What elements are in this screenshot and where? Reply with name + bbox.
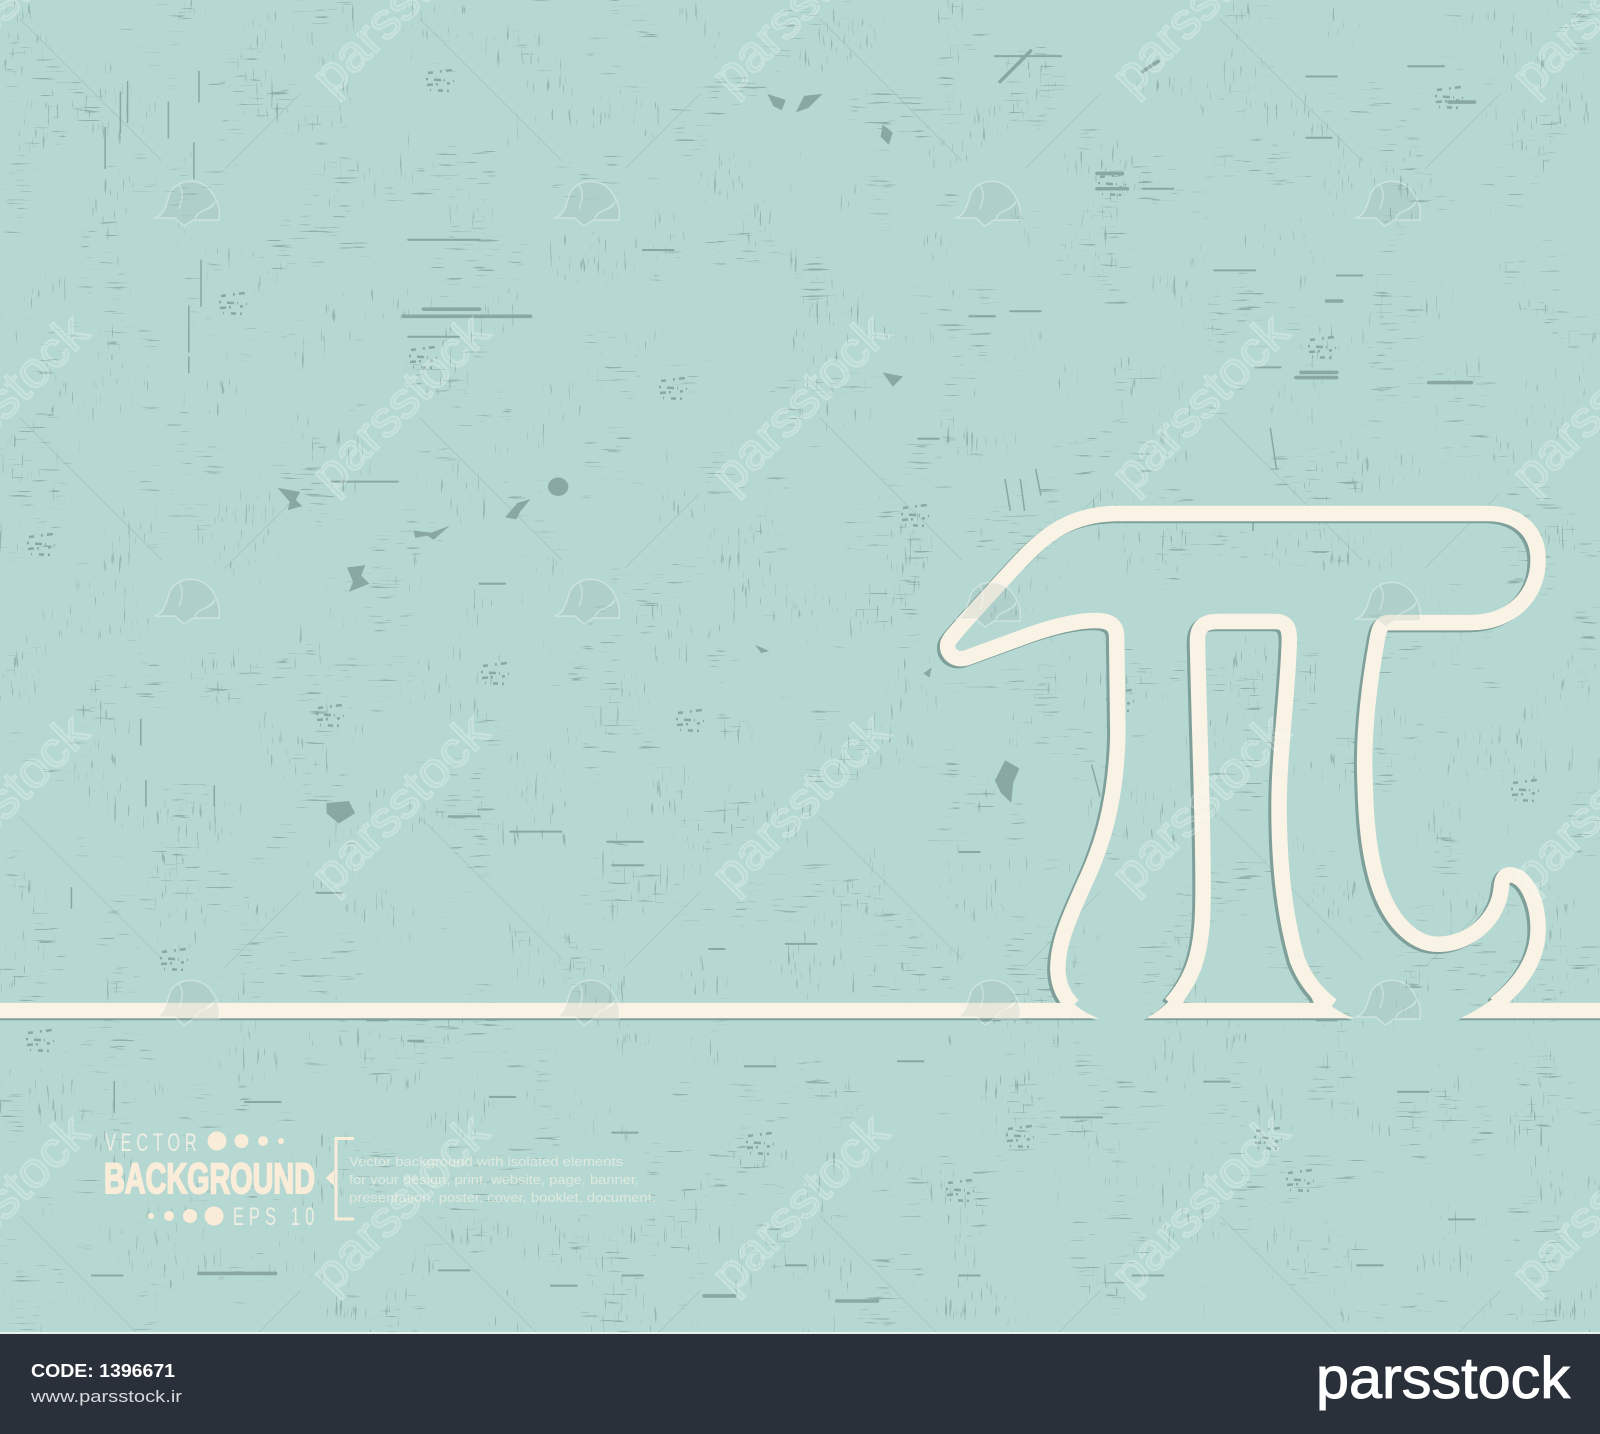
footer bar bbox=[0, 1332, 1600, 1434]
pi middle stem outline bbox=[1171, 622, 1332, 1006]
pi outer outline bbox=[948, 514, 1538, 1006]
description text bbox=[349, 1154, 656, 1205]
watermark: repeated parsstock text: parsstock bbox=[700, 703, 900, 903]
top dots bbox=[208, 1132, 284, 1150]
website: www.parsstock.ir bbox=[30, 1387, 182, 1406]
logo wordmark: parsstock bbox=[1316, 1346, 1571, 1411]
description text: Vector background with isolated elements bbox=[349, 1154, 624, 1169]
watermark: repeated parsstock text: parsstock bbox=[300, 1103, 500, 1303]
watermark: repeated parsstock text: parsstock bbox=[1100, 1103, 1300, 1303]
heading: VECTOR: VECTOR bbox=[105, 1130, 197, 1157]
middle foot base bbox=[1146, 964, 1355, 1018]
watermark: repeated parsstock text: parsstock bbox=[700, 303, 900, 503]
description text: for your design, print, website, page, banner, bbox=[349, 1172, 639, 1187]
bracket arrow bbox=[326, 1170, 334, 1186]
description text: presentation, poster, cover, booklet, document. bbox=[349, 1190, 656, 1205]
baseline right with hook foot bbox=[1461, 971, 1600, 1018]
watermark: repeated parsstock text: parsstock bbox=[1100, 303, 1300, 503]
watermark: elephant icons bbox=[154, 181, 1420, 1025]
watermark: repeated parsstock text: parsstock bbox=[300, 303, 500, 503]
label: EPS 10: EPS 10 bbox=[233, 1204, 314, 1231]
bottom dots bbox=[148, 1206, 224, 1226]
watermark: repeated parsstock text: parsstock bbox=[300, 703, 500, 903]
watermark: repeated parsstock text: parsstock bbox=[1100, 703, 1300, 903]
code label: CODE: 1396671 bbox=[31, 1361, 175, 1381]
bracket bbox=[336, 1138, 354, 1219]
watermark: repeated parsstock text: parsstock bbox=[700, 1103, 900, 1303]
baseline and pi symbol outline bbox=[0, 514, 1600, 1018]
baseline left with foot bbox=[0, 978, 1100, 1018]
heading: BACKGROUND: BACKGROUND bbox=[104, 1155, 315, 1203]
vector background badge bbox=[104, 1130, 656, 1231]
